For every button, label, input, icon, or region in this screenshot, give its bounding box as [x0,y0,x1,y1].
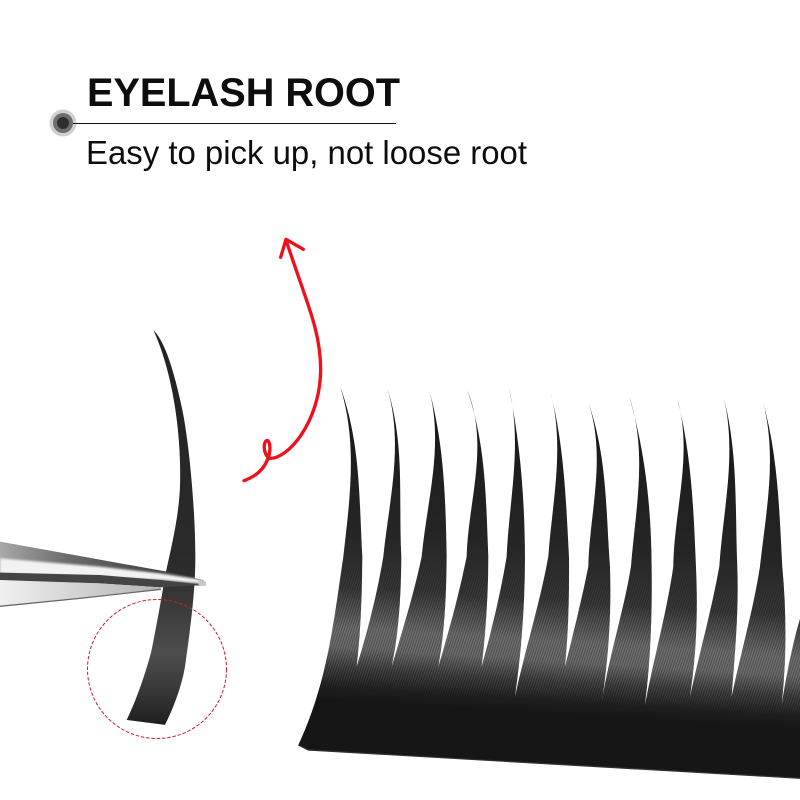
subheading text: Easy to pick up, not loose root [86,134,527,171]
tweezers [0,542,206,607]
heading: EYELASH ROOT [87,71,400,115]
single lash held by tweezers [127,330,195,725]
callout: dashed red circle around root [88,600,226,738]
arrow: curved red arrow [244,239,321,481]
icon: heading marker dot [50,110,76,136]
lash strip [290,380,800,780]
heading underline [73,123,396,124]
